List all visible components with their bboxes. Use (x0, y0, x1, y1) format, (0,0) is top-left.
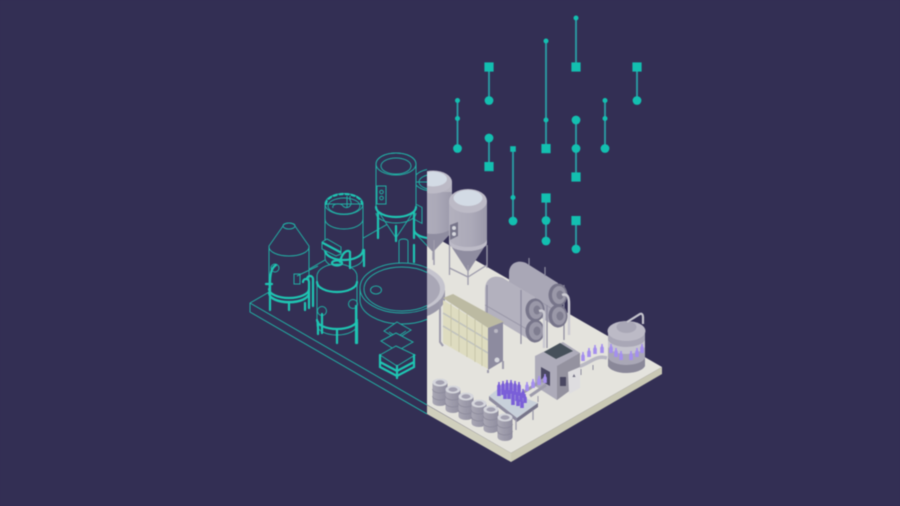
node column 1 (453, 98, 462, 153)
node column 7 (632, 62, 642, 105)
kegs (432, 378, 512, 441)
node column 5 middle (571, 116, 581, 182)
data nodes (453, 16, 642, 253)
filled half: platform and equipment (426, 170, 663, 462)
filter press (440, 294, 504, 373)
node column 5 top (571, 16, 581, 72)
kettle filled (426, 268, 446, 316)
platform (426, 241, 663, 462)
node column 6 (601, 98, 609, 153)
wireframe open vessel (322, 194, 364, 268)
rotary filler (608, 314, 646, 373)
horizontal tanks rear (509, 258, 569, 348)
wireframe conical-top tank (266, 223, 318, 310)
node column 3 (509, 146, 517, 225)
bottle table (489, 378, 546, 430)
wireframe pressure tank (317, 251, 358, 343)
wireframe conical fermenter (376, 153, 416, 241)
wireframe tank rear right (412, 168, 428, 264)
horizontal tanks front (485, 277, 544, 348)
tank rear with cut edge (426, 170, 453, 266)
fermenter tank (449, 189, 487, 285)
node column 4 upper (541, 38, 551, 153)
purple bottles on table (497, 374, 547, 408)
labelling machine (535, 342, 580, 400)
node column 4 lower (541, 193, 551, 245)
wireframe malt mill (380, 322, 415, 378)
node column 5 lower (571, 216, 581, 253)
wireframe kettle (358, 238, 428, 326)
line art half: wireframe brewery (248, 152, 428, 415)
node column 2 upper (484, 62, 494, 105)
node column 2 lower (484, 134, 494, 171)
conveyor to filler (578, 344, 607, 375)
brewery illustration (248, 14, 663, 462)
platform outline (250, 217, 427, 414)
